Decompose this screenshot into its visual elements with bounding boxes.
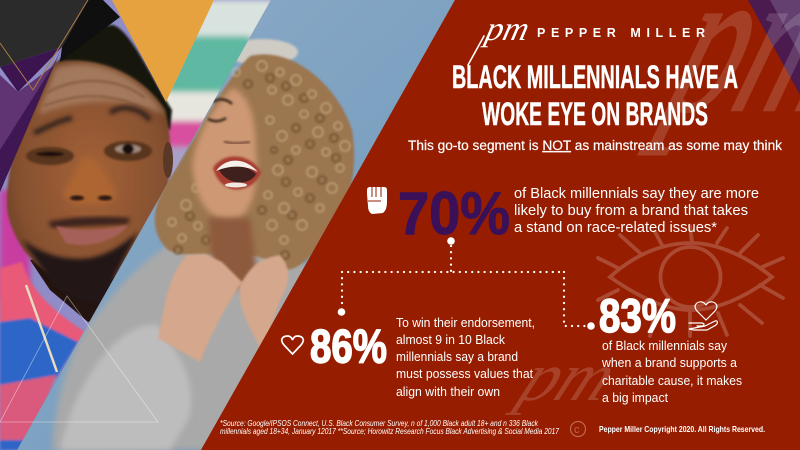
- text: 70% description: [514, 186, 759, 236]
- text: 70% description: of Black millennials say they are more: [514, 186, 759, 202]
- text: 83% description: a big impact: [602, 390, 668, 405]
- man mouth: [56, 225, 128, 245]
- man beard: [22, 232, 138, 305]
- text: 70% description: likely to buy from a brand that takes: [514, 203, 748, 219]
- woman eyes: [208, 99, 232, 121]
- footnote: sources: *Source: Google/IPSOS Connect, U.S. Black Consumer Survey, n of 1,000 Black adult 18+ and n 336 Black: [220, 419, 539, 428]
- woman lower teeth: [225, 182, 247, 188]
- overlay: black triangle: [60, 0, 120, 62]
- stat: 70%: 70%: [398, 180, 510, 247]
- necklace: [26, 285, 57, 372]
- woman mouth: [213, 156, 261, 190]
- photo: man: [0, 0, 275, 450]
- text: 86% description: almost 9 in 10 Black: [396, 332, 505, 347]
- text: 83% description: [601, 338, 742, 405]
- stat: 83%: 83%: [599, 289, 676, 342]
- icon: eye watermark: [598, 226, 783, 336]
- overlay: purple shape: [0, 66, 53, 192]
- text: 83% description: of Black millennials say: [602, 338, 727, 353]
- woman hood: [236, 38, 299, 64]
- icon: heart outline: [282, 336, 303, 354]
- stat: 86%: 86%: [310, 320, 387, 372]
- icon: copyright symbol: [570, 422, 586, 436]
- text: 70% description: a stand on race-related issues*: [514, 220, 717, 236]
- icon: hand holding heart: [689, 302, 717, 330]
- man forehead: [38, 64, 165, 115]
- panel: red background: [201, 0, 800, 450]
- footnote: sources: [220, 419, 559, 436]
- man nostrils: [70, 196, 112, 200]
- woman face: [192, 88, 257, 220]
- woman sweater: [50, 246, 306, 450]
- woman sweater highlight: [60, 325, 191, 450]
- logo script mark: pm: [479, 10, 533, 48]
- overlay: purple sliver: [0, 47, 62, 192]
- text: 83% description: charitable cause, it makes: [602, 373, 742, 388]
- logo wordmark: PEPPER MILLER: [537, 26, 705, 40]
- footnote: sources: millennials aged 18+34, January 12017 **Source; Horowitz Research Focus Black Advertising & Social Media 2017: [220, 427, 559, 436]
- text: 86% description: align with their own: [396, 384, 500, 399]
- text: 83% description: when a brand supports a: [601, 355, 738, 370]
- woman curls: [168, 61, 350, 259]
- man face: [7, 60, 170, 285]
- watermark: pm logo bottom: pm: [504, 338, 630, 415]
- man moustache: [48, 217, 130, 228]
- man hair: [55, 25, 172, 130]
- man brows: [34, 108, 150, 133]
- text: copyright: Pepper Miller Copyright 2020. All Rights Reserved.: [599, 424, 765, 434]
- overlay: dark triangle: [0, 0, 88, 67]
- man nose: [64, 157, 116, 204]
- man neck: [30, 240, 140, 322]
- icon: copyright symbol: c: [574, 424, 580, 436]
- overlay: dark purple triangle: [0, 47, 62, 92]
- subtitle: This go-to segment is NOT as mainstream as some may think: [408, 138, 782, 153]
- text: 86% description: To win their endorsement,: [396, 315, 535, 330]
- woman neck: [208, 218, 258, 290]
- connector: dotted lines: [338, 237, 595, 330]
- man eyes: [26, 141, 152, 165]
- woman hair: [155, 54, 354, 270]
- woman teeth: [216, 161, 258, 172]
- overlay: orange triangle: [112, 0, 214, 102]
- woman nose: [224, 141, 250, 143]
- woman mouth interior: [219, 165, 256, 183]
- woman hands: [158, 254, 288, 362]
- man shirt: [0, 262, 85, 450]
- overlay: thin orange chevron: [0, 0, 88, 90]
- icon: raised fist: [367, 187, 387, 214]
- man ear: [163, 142, 173, 178]
- title: [452, 59, 738, 132]
- text: 86% description: millennials say a brand: [396, 349, 518, 364]
- logo stem: [468, 36, 484, 65]
- text: 86% description: [396, 315, 535, 399]
- text: 86% description: must possess values that: [396, 366, 533, 381]
- corner shape: top-right purple: [748, 0, 800, 95]
- photo: woman: [0, 0, 470, 450]
- logo: Pepper Miller: [468, 10, 705, 65]
- overlay: thin white triangle: [0, 296, 158, 422]
- man forehead wrinkles: [44, 81, 150, 112]
